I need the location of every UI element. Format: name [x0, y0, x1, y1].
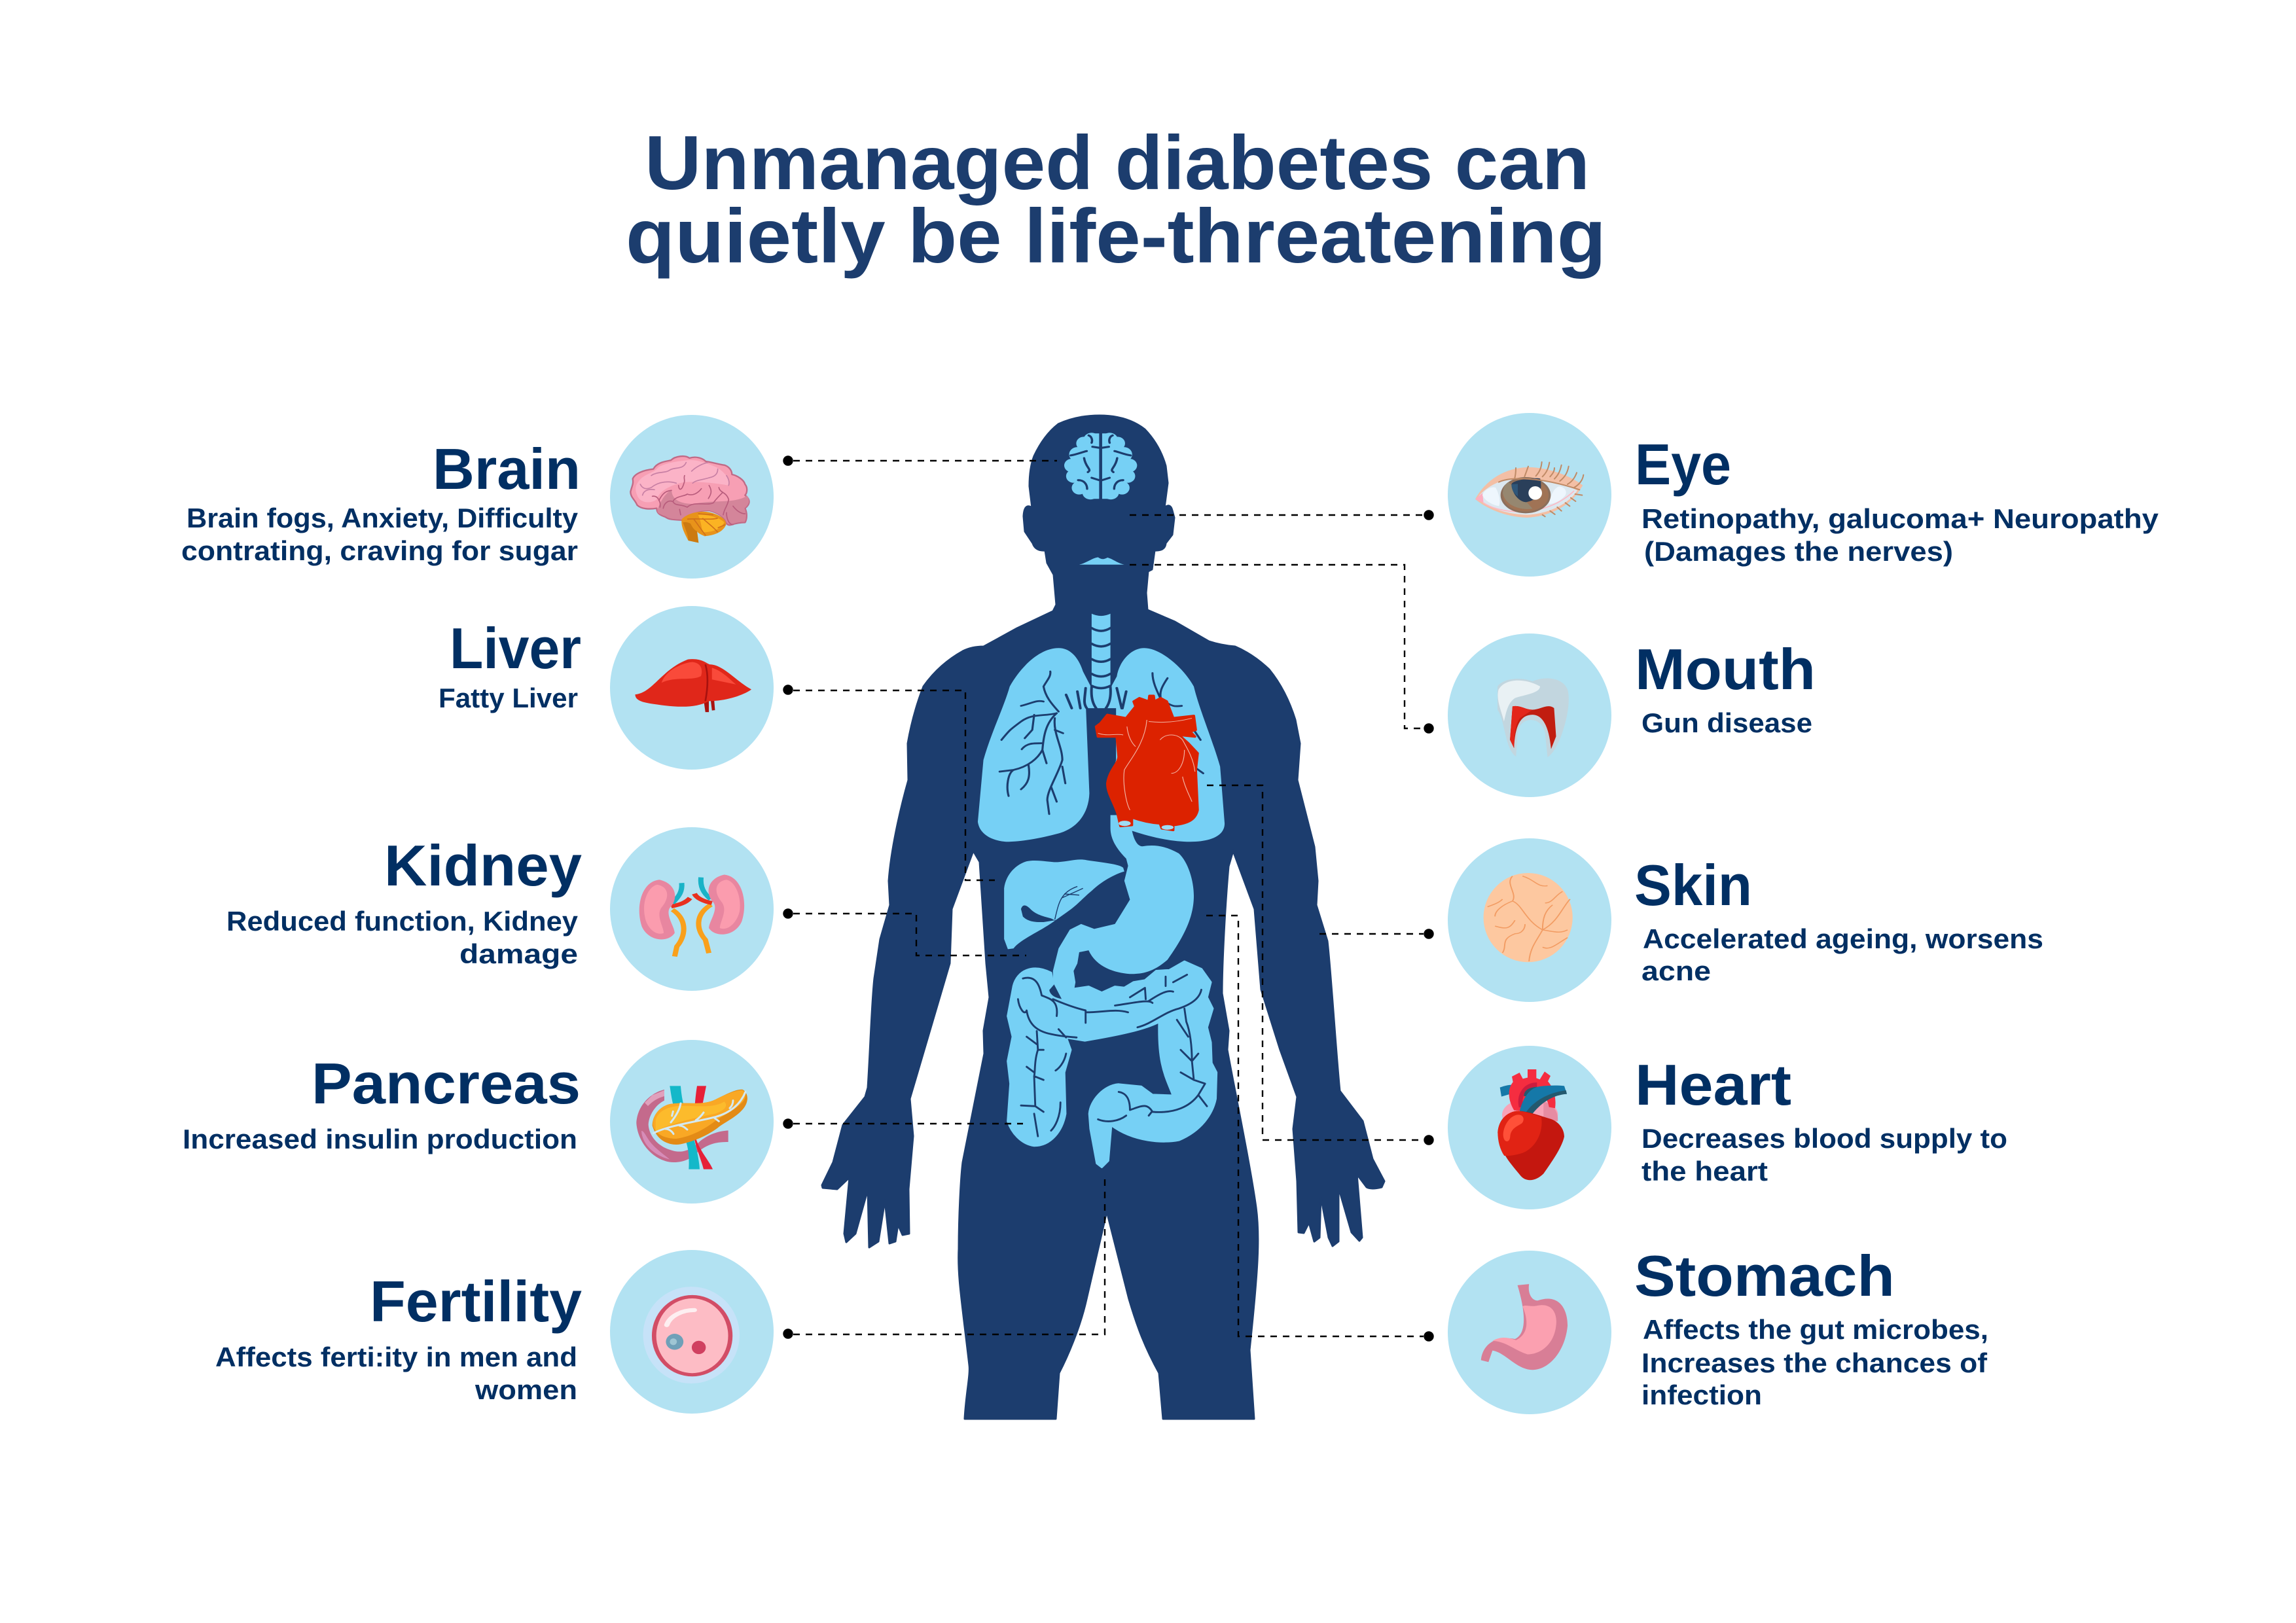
icon: brain in head	[1064, 431, 1137, 501]
panel: mouth label	[1635, 637, 1816, 738]
panel: liver label	[439, 616, 581, 713]
panel: pancreas label: Increased insulin production	[183, 1124, 577, 1154]
panel: stomach label: infection	[1641, 1380, 1762, 1410]
panel: fertility label: Affects ferti:ity in men and	[215, 1342, 577, 1372]
human body silhouette with organs	[822, 416, 1384, 1419]
icon: anatomical heart	[1096, 696, 1198, 830]
panel: eye label	[1635, 432, 2159, 567]
icon: pancreas badge	[610, 1040, 774, 1204]
panel: kidney label	[226, 833, 582, 969]
connector: liver	[783, 685, 995, 880]
panel: pancreas label: Pancreas	[312, 1051, 581, 1116]
connector: eye	[1130, 510, 1434, 520]
icon: eye badge	[1448, 413, 1611, 577]
panel: mouth label: Mouth	[1635, 637, 1816, 702]
icon: tooth badge	[1448, 633, 1611, 797]
icon: colon	[1008, 961, 1216, 1167]
body silhouette	[822, 416, 1384, 1419]
icon: heart badge	[1448, 1046, 1611, 1209]
connector: stomach	[1206, 916, 1434, 1342]
panel: stomach label	[1634, 1243, 1988, 1410]
connector: brain	[783, 455, 1057, 466]
panel: heart label	[1635, 1052, 2007, 1186]
icon: kidney badge	[610, 827, 774, 991]
panel: heart label: Heart	[1635, 1052, 1791, 1117]
connector: heart	[1207, 785, 1434, 1145]
panel: heart label: Decreases blood supply to	[1641, 1123, 2007, 1154]
connector: skin	[1319, 929, 1434, 939]
panel: kidney label: damage	[459, 938, 578, 969]
icon: stomach badge	[1448, 1251, 1611, 1414]
title: quietly be life-threatening	[626, 193, 1606, 279]
panel: liver label: Liver	[450, 616, 581, 681]
panel: brain label: Brain fogs, Anxiety, Difficulty	[187, 503, 579, 533]
icon: skin badge	[1448, 838, 1611, 1002]
panel: brain label	[181, 437, 581, 566]
panel: heart label: the heart	[1641, 1156, 1768, 1186]
panel: fertility label: women	[475, 1374, 577, 1405]
connector: kidney	[783, 908, 1026, 955]
panel: mouth label: Gun disease	[1641, 707, 1812, 738]
abdomen organs drawn in lower-body coordinates	[1004, 815, 1216, 1167]
panel: fertility label	[215, 1269, 582, 1405]
panel: kidney label: Kidney	[384, 833, 582, 898]
panel: pancreas label	[183, 1051, 581, 1154]
panel: skin label: Skin	[1634, 853, 1752, 918]
panel: eye label: Retinopathy, galucoma+ Neuropathy	[1641, 503, 2159, 534]
connector: fertility	[783, 1178, 1105, 1339]
panel: eye label: Eye	[1635, 432, 1731, 497]
connector: pancreas	[783, 1118, 1023, 1129]
panel: stomach label: Stomach	[1634, 1243, 1895, 1308]
panel: brain label: contrating, craving for sugar	[181, 535, 578, 566]
icon: stomach organ in body	[1053, 815, 1194, 1000]
organs drawn in upper-body coordinates	[978, 431, 1225, 842]
panel: fertility label: Fertility	[370, 1269, 582, 1334]
icon: brain badge	[610, 415, 774, 579]
icon: liver organ in body	[1004, 859, 1124, 949]
title	[626, 120, 1606, 279]
panel: skin label: acne	[1641, 955, 1711, 986]
panel: stomach label: Affects the gut microbes,	[1643, 1314, 1988, 1345]
icon: liver badge	[610, 606, 774, 770]
icon: lungs and trachea	[978, 614, 1225, 842]
panel: eye label: (Damages the nerves)	[1644, 536, 1953, 567]
icon: fertility badge	[610, 1250, 774, 1414]
panel: skin label: Accelerated ageing, worsens	[1643, 923, 2043, 954]
title: Unmanaged diabetes can	[645, 120, 1590, 205]
panel: stomach label: Increases the chances of	[1641, 1347, 1988, 1378]
panel: skin label	[1634, 853, 2043, 986]
panel: liver label: Fatty Liver	[439, 683, 578, 713]
connector: mouth	[1130, 565, 1434, 734]
panel: brain label: Brain	[433, 437, 581, 501]
icon: mouth	[1079, 558, 1124, 565]
panel: kidney label: Reduced function, Kidney	[226, 906, 579, 936]
